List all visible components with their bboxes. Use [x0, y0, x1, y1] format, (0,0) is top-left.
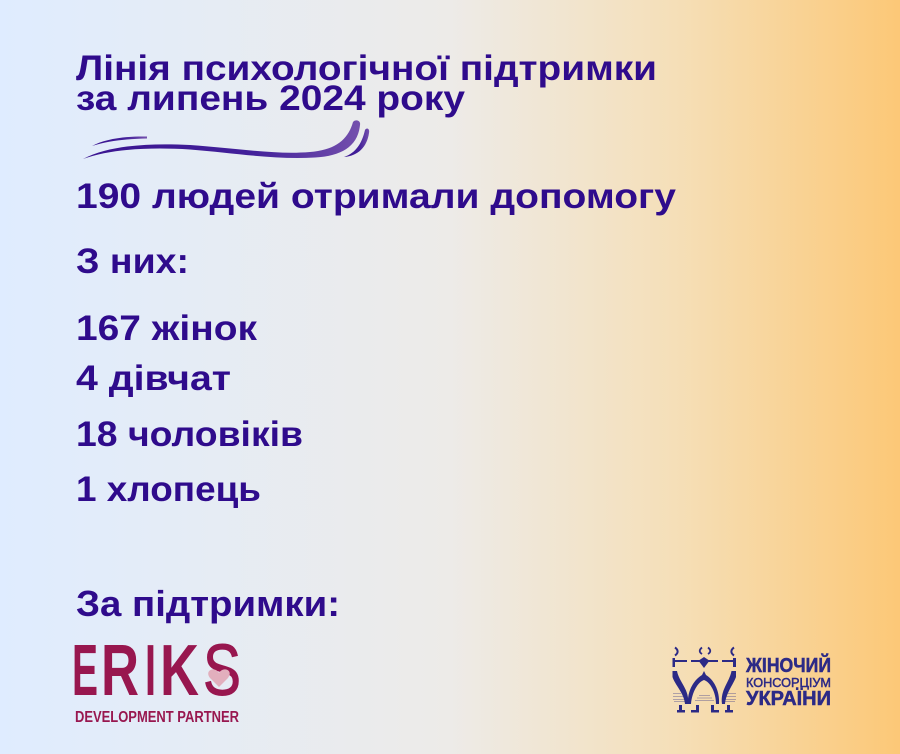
headline: people helped: 190 людей отримали допомогу [76, 177, 677, 216]
title: Лінія психологічної підтримки [76, 49, 657, 88]
logo: ERIKS Development Partner: I [145, 631, 156, 711]
logo: ERIKS Development Partner: E [72, 631, 98, 711]
logo wordmark: УКРАЇНИ [746, 687, 831, 710]
icon: heart [208, 669, 230, 687]
stat: boy: 1 хлопець [76, 470, 261, 509]
logo: ERIKS Development Partner: K [160, 631, 199, 711]
logo: ERIKS Development Partner: S [203, 631, 241, 711]
subheading: of them: З них: [76, 242, 189, 281]
logo: ERIKS Development Partner [72, 631, 241, 726]
title: за липень 2024 року [76, 79, 466, 118]
title [76, 49, 657, 118]
logo: ERIKS Development Partner: R [101, 631, 139, 711]
stat: women: 167 жінок [76, 309, 258, 348]
logo wordmark [745, 653, 831, 710]
decorative swoosh under title [83, 120, 369, 159]
stat: girls: 4 дівчат [76, 359, 231, 398]
stat: men: 18 чоловіків [76, 415, 303, 454]
logo: Women's Consortium of Ukraine [672, 648, 831, 712]
icon: three figures emblem [672, 648, 736, 712]
logo: ERIKS Development Partner: DEVELOPMENT PARTNER [75, 709, 239, 726]
logo wordmark: КОНСОРЦІУМ [746, 675, 831, 690]
logo wordmark: ЖІНОЧИЙ [745, 653, 831, 677]
supported by heading: За підтримки: [76, 583, 340, 624]
